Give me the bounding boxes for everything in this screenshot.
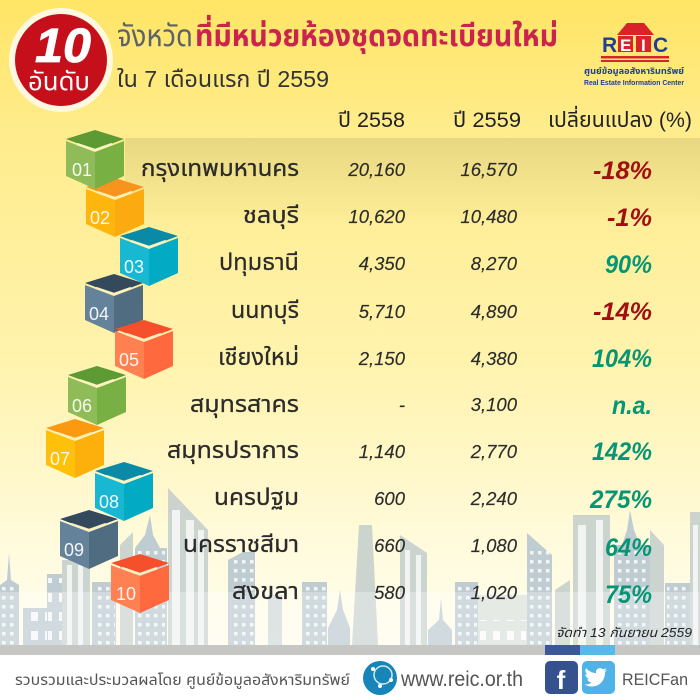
row 10 [232,578,652,609]
row 9 [183,531,652,562]
row 3 [219,249,652,279]
row 10: 75% [605,581,652,609]
row 4: นนทบุรี [231,297,299,324]
row 5: 4,380 [471,348,518,369]
title: ที่มีหน่วยห้องชุดจดทะเบียนใหม่ [195,14,558,54]
box 03 [120,227,178,286]
box 10 [111,554,169,613]
row 2: 10,480 [460,206,518,227]
row 3: 8,270 [471,253,518,274]
row 1 [141,155,652,185]
REIC logo: C [653,34,668,57]
icon: facebook [545,661,578,695]
REIC logo: I [641,36,646,55]
row 8: 600 [374,488,406,509]
title: จังหวัด [117,20,193,53]
row 5 [218,344,652,373]
row 2 [243,202,652,232]
icon: twitter [582,661,615,694]
row 6: - [399,394,405,415]
row 1: 20,160 [347,159,406,180]
row 1: -18% [593,157,652,185]
row 3: 90% [605,251,652,279]
city skyline [0,488,700,645]
title [117,14,558,54]
row 9: 64% [605,534,652,562]
footer credit: รวบรวมและประมวลผลโดย ศูนย์ข้อมูลอสังหาริมทรัพย์ [15,672,350,689]
column headers: ปี 2559 [453,109,521,132]
row 4: 4,890 [471,301,518,322]
table shaded band [125,138,700,228]
REIC logo: E [620,36,631,55]
row 5: 104% [592,345,652,373]
row 5: เชียงใหม่ [218,344,299,370]
box 05 [115,320,173,379]
box 08: 08 [99,492,119,512]
column headers: เปลี่ยนแปลง (%) [548,105,692,132]
REIC logo: ศูนย์ข้อมูลอสังหาริมทรัพย์ [584,66,684,76]
row 7: สมุทรปราการ [167,437,299,464]
row 6: 3,100 [471,394,518,415]
box 02 [86,178,144,237]
box 06 [68,366,126,425]
date note: จัดทำ 13 กันยายน 2559 [556,625,692,640]
icon: facebook: f [557,665,566,695]
box 08 [95,462,153,521]
row 7: 1,140 [359,441,406,462]
row 4: 5,710 [359,301,406,322]
row 6: สมุทรสาคร [190,391,299,418]
row 4 [231,297,652,326]
row 8: นครปฐม [214,484,299,510]
box 01: 01 [72,160,92,180]
row 8: 2,240 [470,488,518,509]
badge label: อันดับ [28,66,90,96]
row 7: 2,770 [470,441,518,462]
ground and footer divider band [0,645,700,655]
box 09 [60,510,118,569]
row 1: 16,570 [460,159,518,180]
row 7: 142% [592,438,652,466]
social handle: REICFan [622,670,688,689]
row 10: สงขลา [232,578,299,604]
row 7 [167,437,652,466]
row 6 [190,391,652,420]
subtitle: ใน 7 เดือนแรก ปี 2559 [117,66,329,92]
row 8: 275% [589,486,652,514]
box 04: 04 [89,304,109,324]
icon: globe [363,661,397,695]
box 04 [85,274,143,333]
row 8 [214,484,652,514]
badge number: 10 [35,20,91,73]
row 5: 2,150 [358,348,406,369]
REIC logo: R [602,34,617,57]
row 2: 10,620 [348,206,406,227]
box 07: 07 [50,449,70,469]
website: www.reic.or.th [400,668,523,691]
column headers [338,105,692,132]
REIC logo [584,23,684,87]
social colour tabs [545,645,615,655]
box 01 [66,130,124,189]
box 09: 09 [64,540,84,560]
box 07 [46,419,104,478]
row 3: ปทุมธานี [219,249,299,276]
box 10: 10 [116,584,136,604]
box 06: 06 [72,396,92,416]
row 6: n.a. [612,392,652,420]
row 9: นครราชสีมา [183,531,299,557]
REIC logo: Real Estate Information Center [584,80,684,87]
row 10: 1,020 [471,582,518,603]
row 3: 4,350 [359,253,406,274]
column headers: ปี 2558 [338,109,405,132]
footer background [0,655,700,700]
box 02: 02 [90,208,110,228]
box 03: 03 [124,257,144,277]
row 1: กรุงเทพมหานคร [141,155,299,182]
row 10: 580 [374,582,406,603]
row 9: 660 [374,535,406,556]
rank badge [9,8,113,112]
box 05: 05 [119,350,139,370]
row 2: ชลบุรี [243,202,299,229]
row 9: 1,080 [471,535,518,556]
row 4: -14% [593,298,652,326]
row 2: -1% [607,204,652,232]
